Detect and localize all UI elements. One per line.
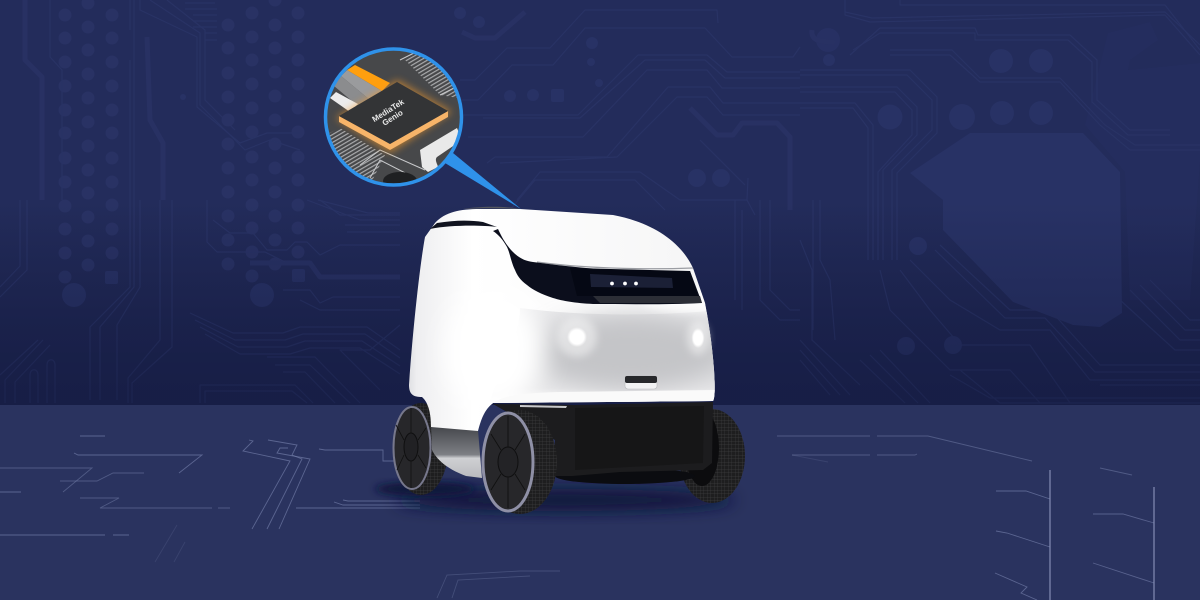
roof sensor bar <box>463 207 520 209</box>
thin bus traces <box>460 10 718 80</box>
visor <box>493 229 702 304</box>
white corner shape <box>420 128 462 172</box>
rear right wheel <box>679 409 745 503</box>
rear underbody <box>555 468 695 484</box>
hatched traces <box>329 54 457 180</box>
body shell <box>409 209 715 431</box>
chip side <box>339 111 448 150</box>
orange stripe <box>347 65 390 91</box>
visor panel <box>570 268 698 296</box>
top seam stripe <box>430 221 497 229</box>
right headlight <box>687 321 709 355</box>
lower skirt <box>431 426 482 478</box>
floor <box>0 405 1200 600</box>
left pads <box>65 0 298 277</box>
background: upper wall <box>0 0 1200 405</box>
chip label: MediaTek <box>371 97 406 124</box>
board outlines <box>360 53 454 178</box>
large pads and solid areas <box>62 7 1200 355</box>
magnifier callout <box>320 44 521 209</box>
chip label: Genio <box>381 108 405 128</box>
roof edge highlight <box>537 262 693 269</box>
background: circuit board pattern <box>0 0 1200 403</box>
chip top <box>339 82 448 144</box>
callout pointer <box>445 153 521 209</box>
handle <box>625 376 657 389</box>
background: lower fade <box>0 0 1200 405</box>
lens ring <box>326 49 462 185</box>
front wheel <box>483 410 557 514</box>
black pad <box>383 172 416 184</box>
visor reflection <box>592 295 702 303</box>
delivery robot <box>394 200 760 514</box>
rear left wheel <box>394 403 448 495</box>
robot shadow <box>375 482 735 511</box>
display <box>590 274 673 288</box>
front bumper <box>493 402 713 476</box>
lens content <box>327 50 460 184</box>
chip glow <box>336 80 452 153</box>
white stripe <box>330 92 358 112</box>
left headlight <box>557 317 597 357</box>
floor circuit lines <box>0 436 1154 600</box>
gray stripes <box>341 70 382 100</box>
front face shading <box>526 309 715 402</box>
thick traces <box>25 0 835 277</box>
